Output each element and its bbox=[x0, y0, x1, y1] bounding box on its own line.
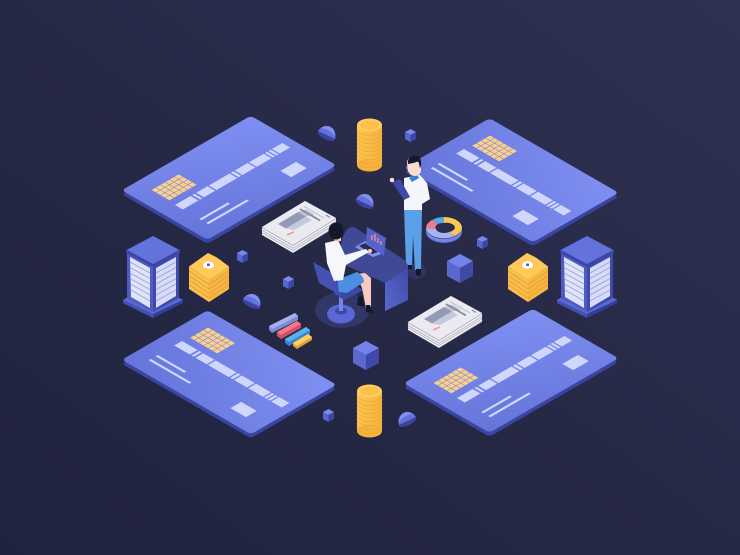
document stack: upper bbox=[262, 201, 336, 253]
chair: post bbox=[339, 296, 343, 311]
chair: seat bbox=[333, 283, 364, 300]
laptop bbox=[355, 227, 386, 257]
document stack: lower bbox=[408, 296, 482, 348]
man standing with clipboard bbox=[390, 156, 430, 279]
dome: left bbox=[243, 294, 261, 309]
card: top left bbox=[122, 116, 336, 244]
dome: bottom bbox=[398, 412, 416, 427]
desk: top bbox=[338, 227, 408, 283]
man: shirt bbox=[404, 175, 430, 210]
dome: top bbox=[318, 126, 336, 141]
dome: center bbox=[356, 194, 374, 209]
desk bbox=[338, 227, 408, 311]
chair bbox=[313, 262, 369, 328]
chair: base bbox=[327, 304, 355, 324]
cube: small right bbox=[477, 236, 488, 249]
laptop: base bbox=[355, 241, 384, 257]
woman: far leg bbox=[356, 273, 371, 308]
paper stack: left bbox=[189, 253, 229, 302]
server: right bbox=[557, 236, 617, 318]
woman: shoes bbox=[357, 296, 373, 313]
cube: small bottom bbox=[323, 409, 334, 422]
woman: hand bbox=[368, 249, 372, 253]
woman: shirt bbox=[325, 240, 369, 281]
cube: large right bbox=[447, 254, 473, 283]
woman: hair bbox=[328, 222, 344, 240]
chalk bars bbox=[269, 313, 312, 349]
paper stack: right bbox=[508, 253, 548, 302]
card: top right bbox=[404, 118, 619, 246]
coin stack: bottom bbox=[357, 384, 382, 438]
chair: backrest bbox=[313, 262, 341, 296]
man: shoes bbox=[408, 265, 421, 276]
cube: small center left bbox=[283, 276, 294, 289]
donut chart bbox=[426, 217, 462, 243]
card: bottom right bbox=[404, 309, 618, 437]
desk: base leg bbox=[385, 266, 408, 311]
man: clipboard bbox=[392, 179, 410, 200]
card: bottom left bbox=[122, 310, 337, 438]
man: collar bbox=[409, 174, 419, 182]
coin stack: top bbox=[357, 118, 382, 172]
woman seated bbox=[325, 222, 373, 313]
server: left bbox=[123, 236, 183, 318]
man: hair bbox=[408, 156, 421, 168]
cube: small left bbox=[237, 250, 248, 263]
cube: small top bbox=[405, 129, 416, 142]
cube: large bottom bbox=[353, 341, 379, 370]
chair: floor circle bbox=[315, 292, 369, 328]
woman: skirt bbox=[337, 272, 364, 293]
man: trousers bbox=[404, 208, 422, 270]
man: head bbox=[407, 156, 421, 176]
man: hand bbox=[390, 178, 394, 182]
woman: neck bbox=[333, 234, 341, 242]
man: ground shadow bbox=[406, 263, 426, 279]
laptop: screen bbox=[366, 227, 386, 256]
